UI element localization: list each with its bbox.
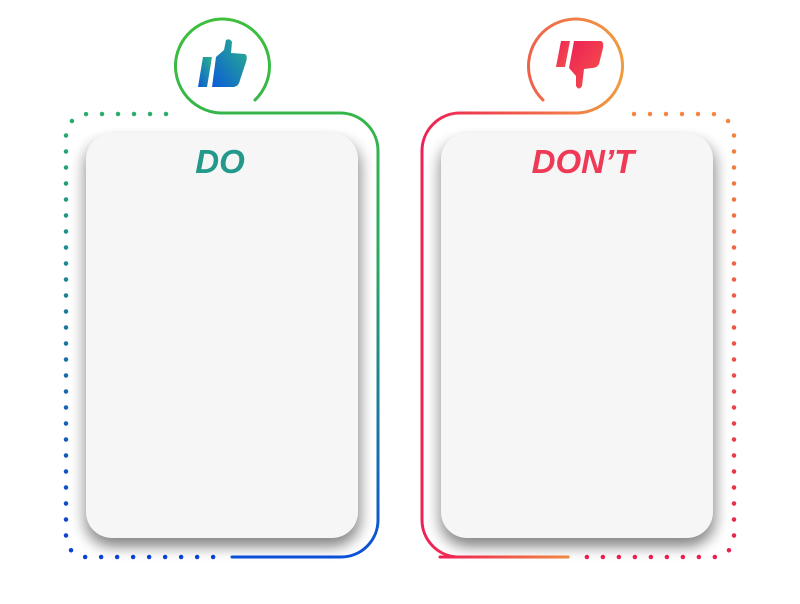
dotted line: dont [586,114,734,557]
panel: do card [86,133,358,538]
dotted line: do [66,114,216,557]
icon: thumbs down [556,41,603,88]
heading: DO: DO [195,143,245,180]
panel: dont card [441,133,713,538]
icon: thumbs up [198,39,247,87]
frame line: do [175,19,378,557]
heading: DON'T: DON’T [532,143,634,180]
frame line: dont [422,19,623,557]
